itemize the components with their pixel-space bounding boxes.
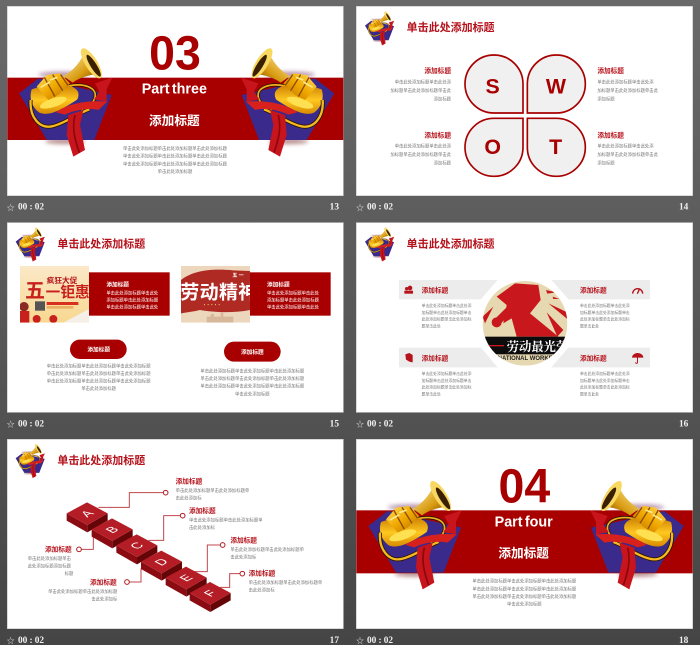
footer time: ☆ (356, 420, 364, 429)
SWOT letters (484, 74, 567, 159)
label F: 添加标题 (249, 569, 276, 578)
box 2 text (267, 281, 320, 310)
item bottom right: 题单击此处 (580, 391, 599, 396)
item top left: 题单击此处 (422, 324, 441, 329)
box 2 text: 添加标题单击此处添加标题 (267, 296, 320, 303)
text T (597, 130, 659, 166)
red band (356, 510, 693, 573)
box 1 text: 添加标题 (106, 281, 129, 289)
text W: 添加标题 (597, 66, 624, 75)
block A: A (77, 508, 98, 519)
body text: 单击此处添加标题单击此处添加标题单击此处添加标题 (123, 153, 228, 160)
item bottom right (580, 354, 630, 396)
body text: 单击此处添加标题单击此处添加标题单击此处添加标题 (472, 593, 577, 600)
label D: 添加标题 (90, 578, 117, 587)
slide 15: two photos (7, 223, 343, 429)
footer time: ☆ (7, 420, 15, 429)
SWOT letters: S (486, 74, 500, 98)
text S: 添加标题 (434, 95, 452, 102)
photo: May Day sale: 疯狂大促 (47, 275, 78, 285)
item top right: 添加标题 (580, 286, 607, 295)
box 2 text: 添加标题 (267, 281, 290, 289)
item top right: 单击此处添加标题单击此处添 (580, 303, 630, 308)
title: 单击此处添加标题 (407, 236, 495, 250)
photo: labour spirit: 五 一 (232, 273, 244, 279)
logo emblem (16, 227, 45, 261)
label A: 添加标题 (176, 477, 203, 486)
box 2 text: 单击此处添加标题单击此处 (267, 289, 320, 296)
poster circle: NATIONAL WORKERS (498, 356, 561, 362)
page number: 13 (330, 203, 339, 213)
item bottom right: 单击此处添加标题单击此处添 (580, 371, 630, 376)
section heading: 添加标题 (498, 546, 549, 561)
text W (597, 66, 659, 102)
label F: 单击此处添加标题单击此处添加标题单 (249, 579, 323, 586)
left emblem (19, 45, 112, 157)
box 1 text: 添加标题单击此处添加标题 (106, 296, 159, 303)
text S: 加标题单击此处添加标题单击此 (390, 87, 452, 94)
text W: 加标题单击此处添加标题单击此 (597, 87, 659, 94)
item bottom left (422, 354, 472, 396)
red band (7, 78, 343, 140)
slide 14: SWOT (356, 6, 693, 213)
footer time (356, 419, 393, 429)
block D: D (151, 557, 172, 567)
label D: 单击此处添加标题单击此处添加标题 (48, 588, 118, 595)
label C: 击此处添加标 (189, 524, 216, 531)
part label: Part four (495, 515, 553, 531)
section number: 03 (149, 26, 201, 80)
text W: 添加标题 (597, 95, 615, 102)
item top left: 单击此处添加标题单击此处添 (422, 303, 472, 308)
footer time (7, 203, 44, 213)
text S (390, 66, 452, 102)
label E: 击此处添加标 (230, 553, 257, 560)
box 2 text: 单击此处添加标题单击此处 (267, 303, 320, 310)
footer time (7, 419, 44, 429)
label C: 单击此处添加标题单击此处添加标题单 (189, 516, 263, 523)
label E: 添加标题 (230, 535, 257, 544)
item top right: 此处添加标题单击此处添加标 (580, 317, 630, 322)
right emblem (590, 478, 684, 589)
title: 单击此处添加标题 (57, 453, 145, 467)
body text (123, 145, 228, 175)
text T: 添加标题 (597, 130, 624, 139)
SWOT letters: W (546, 74, 567, 98)
text O: 添加标题 (424, 130, 451, 139)
item bottom right: 此处添加标题单击此处添加标 (580, 385, 630, 390)
footer time: 00 : 02 (367, 419, 393, 429)
label B (28, 545, 74, 577)
text T: 加标题单击此处添加标题单击此 (597, 151, 659, 158)
SWOT letters: T (549, 135, 562, 159)
left emblem (368, 478, 462, 589)
slide 18: section four (356, 439, 693, 645)
block E: E (176, 573, 196, 583)
label C (189, 506, 263, 531)
photo: labour spirit (181, 266, 250, 323)
item top right: 加标题单击此处添加标题单击 (580, 310, 630, 315)
poster circle (483, 281, 568, 366)
photo: labour spirit: 劳动精神 (180, 281, 258, 303)
item top left (422, 286, 472, 329)
poster circle: 劳动最光荣 (507, 339, 568, 354)
button 1 (70, 340, 127, 359)
block D (141, 551, 182, 581)
item bottom left: 单击此处添加标题单击此处添 (422, 371, 472, 376)
label D: 击此处添加标 (91, 596, 118, 603)
title: 单击此处添加标题 (407, 20, 495, 34)
button 2 text: 单击此处添加标题单击此处添加标题单击此处添加标题 (200, 375, 305, 382)
button 2 text (200, 367, 305, 397)
title: 单击此处添加标题 (57, 236, 145, 250)
item top right: 题单击此处 (580, 324, 599, 329)
label B: 标题 (65, 570, 74, 577)
label E (230, 535, 305, 560)
footer time: ☆ (356, 203, 364, 212)
label F (249, 569, 323, 594)
white hexagon (479, 278, 570, 369)
page number: 14 (679, 203, 689, 213)
text O: 加标题单击此处添加标题单击此 (390, 151, 452, 158)
text O: 添加标题 (434, 159, 452, 166)
photo: May Day sale: 一钜惠 (46, 283, 90, 301)
icon: gauge (633, 289, 643, 294)
block C: C (127, 540, 147, 551)
footer time (356, 203, 393, 213)
connector lines (77, 490, 245, 587)
body text: 单击此处添加标题单击此处添加标题单击此处添加标题 (123, 160, 228, 167)
block E (166, 567, 207, 597)
block B: B (102, 525, 122, 535)
item top right (580, 286, 630, 329)
button 2 text: 单击此处添加标题单击此处添加标题单击此处添加标题 (200, 383, 305, 390)
body text: 单击此处添加标题单击此处添加标题单击此处添加标题 (472, 585, 577, 592)
button 2 (224, 342, 281, 362)
text O: 单击此处添加标题单击此处添 (395, 142, 452, 149)
block C (116, 534, 157, 564)
body text (472, 578, 577, 608)
block A (67, 502, 108, 532)
slide 17: A-F blocks (7, 439, 343, 645)
footer time: 00 : 02 (367, 203, 393, 213)
item top left: 加标题单击此处添加标题单击 (422, 310, 472, 315)
label B: 添加标题 (45, 545, 72, 554)
item bottom left: 此处添加标题单击此处添加标 (422, 385, 472, 390)
footer time (7, 636, 44, 645)
text T: 添加标题 (597, 159, 615, 166)
part label: Part three (142, 81, 207, 97)
red box 1 (89, 272, 170, 316)
item bottom right: 添加标题 (580, 354, 607, 363)
block B (92, 518, 133, 548)
item bottom left: 题单击此处 (422, 391, 441, 396)
label E: 单击此处添加标题单击此处添加标题单 (230, 546, 305, 553)
button 1 text: 单击此处添加标题单击此处添加标题单击此处添加标题 (47, 370, 151, 377)
button 1 text: 单击此处添加标题 (81, 385, 117, 392)
button 1 text: 单击此处添加标题单击此处添加标题单击此处添加标题 (47, 362, 151, 369)
item top left: 此处添加标题单击此处添加标 (422, 317, 472, 322)
box 1 text: 单击此处添加标题单击此处 (106, 303, 159, 310)
icon: umbrella (632, 353, 643, 364)
slide 16: circle with four items (356, 223, 693, 429)
text S: 单击此处添加标题单击此处添 (395, 78, 452, 85)
SWOT petals (465, 55, 585, 176)
text S: 添加标题 (424, 66, 451, 75)
text W: 单击此处添加标题单击此处添 (597, 78, 654, 85)
label D (48, 578, 118, 603)
button 2 text: 单击此处添加标题单击此处添加标题单击此处添加标题 (200, 367, 305, 374)
section heading: 添加标题 (149, 113, 200, 128)
button 1: 添加标题 (87, 345, 110, 353)
photo: May Day sale (19, 266, 90, 323)
slide 13: section three (7, 6, 343, 213)
button 2: 添加标题 (241, 348, 264, 356)
text T: 单击此处添加标题单击此处添 (597, 142, 654, 149)
label A: 单击此处添加标题单击此处添加标题单 (176, 487, 250, 494)
body text: 单击此处添加标题单击此处添加标题单击此处添加标题 (123, 145, 228, 152)
item bottom right: 加标题单击此处添加标题单击 (580, 378, 630, 383)
body text: 单击此处添加标题单击此处添加标题单击此处添加标题 (472, 578, 577, 585)
text O (390, 130, 452, 166)
icon: people (404, 286, 413, 294)
label C: 添加标题 (189, 506, 216, 515)
footer time: 00 : 02 (18, 203, 44, 213)
logo emblem (16, 443, 45, 478)
section number: 04 (498, 459, 550, 513)
item bottom left: 添加标题 (422, 354, 449, 363)
box 1 text: 单击此处添加标题单击此处 (106, 289, 159, 296)
photo: May Day sale: 五 (25, 281, 45, 303)
block F (190, 582, 231, 612)
button 1 text (47, 362, 151, 392)
footer time: 00 : 02 (18, 419, 44, 429)
item bottom left: 加标题单击此处添加标题单击 (422, 378, 472, 383)
page number: 15 (330, 419, 339, 429)
footer time: ☆ (7, 203, 15, 212)
body text: 单击此处添加标题 (158, 168, 193, 175)
button 2 text: 单击此处添加标题 (235, 390, 270, 397)
icon: book (405, 353, 413, 362)
item top left: 添加标题 (422, 286, 449, 295)
label A (176, 477, 250, 501)
label B: 单击此处添加标题单击 (28, 555, 72, 562)
right emblem (241, 45, 334, 157)
label F: 击此处添加标 (249, 587, 275, 594)
body text: 单击此处添加标题 (507, 601, 542, 608)
page number: 16 (679, 419, 689, 429)
button 1 text: 单击此处添加标题单击此处添加标题单击此处添加标题 (47, 378, 151, 385)
footer time (356, 636, 393, 645)
grey bands (399, 280, 650, 367)
logo emblem (365, 227, 394, 261)
label B: 此处添加标题添加标题 (28, 562, 72, 569)
logo emblem (365, 11, 394, 45)
SWOT letters: O (484, 135, 501, 159)
box 1 text (106, 281, 159, 310)
label A: 击此处添加标 (176, 494, 202, 501)
red box 2 (250, 272, 331, 316)
block F: F (201, 588, 220, 599)
